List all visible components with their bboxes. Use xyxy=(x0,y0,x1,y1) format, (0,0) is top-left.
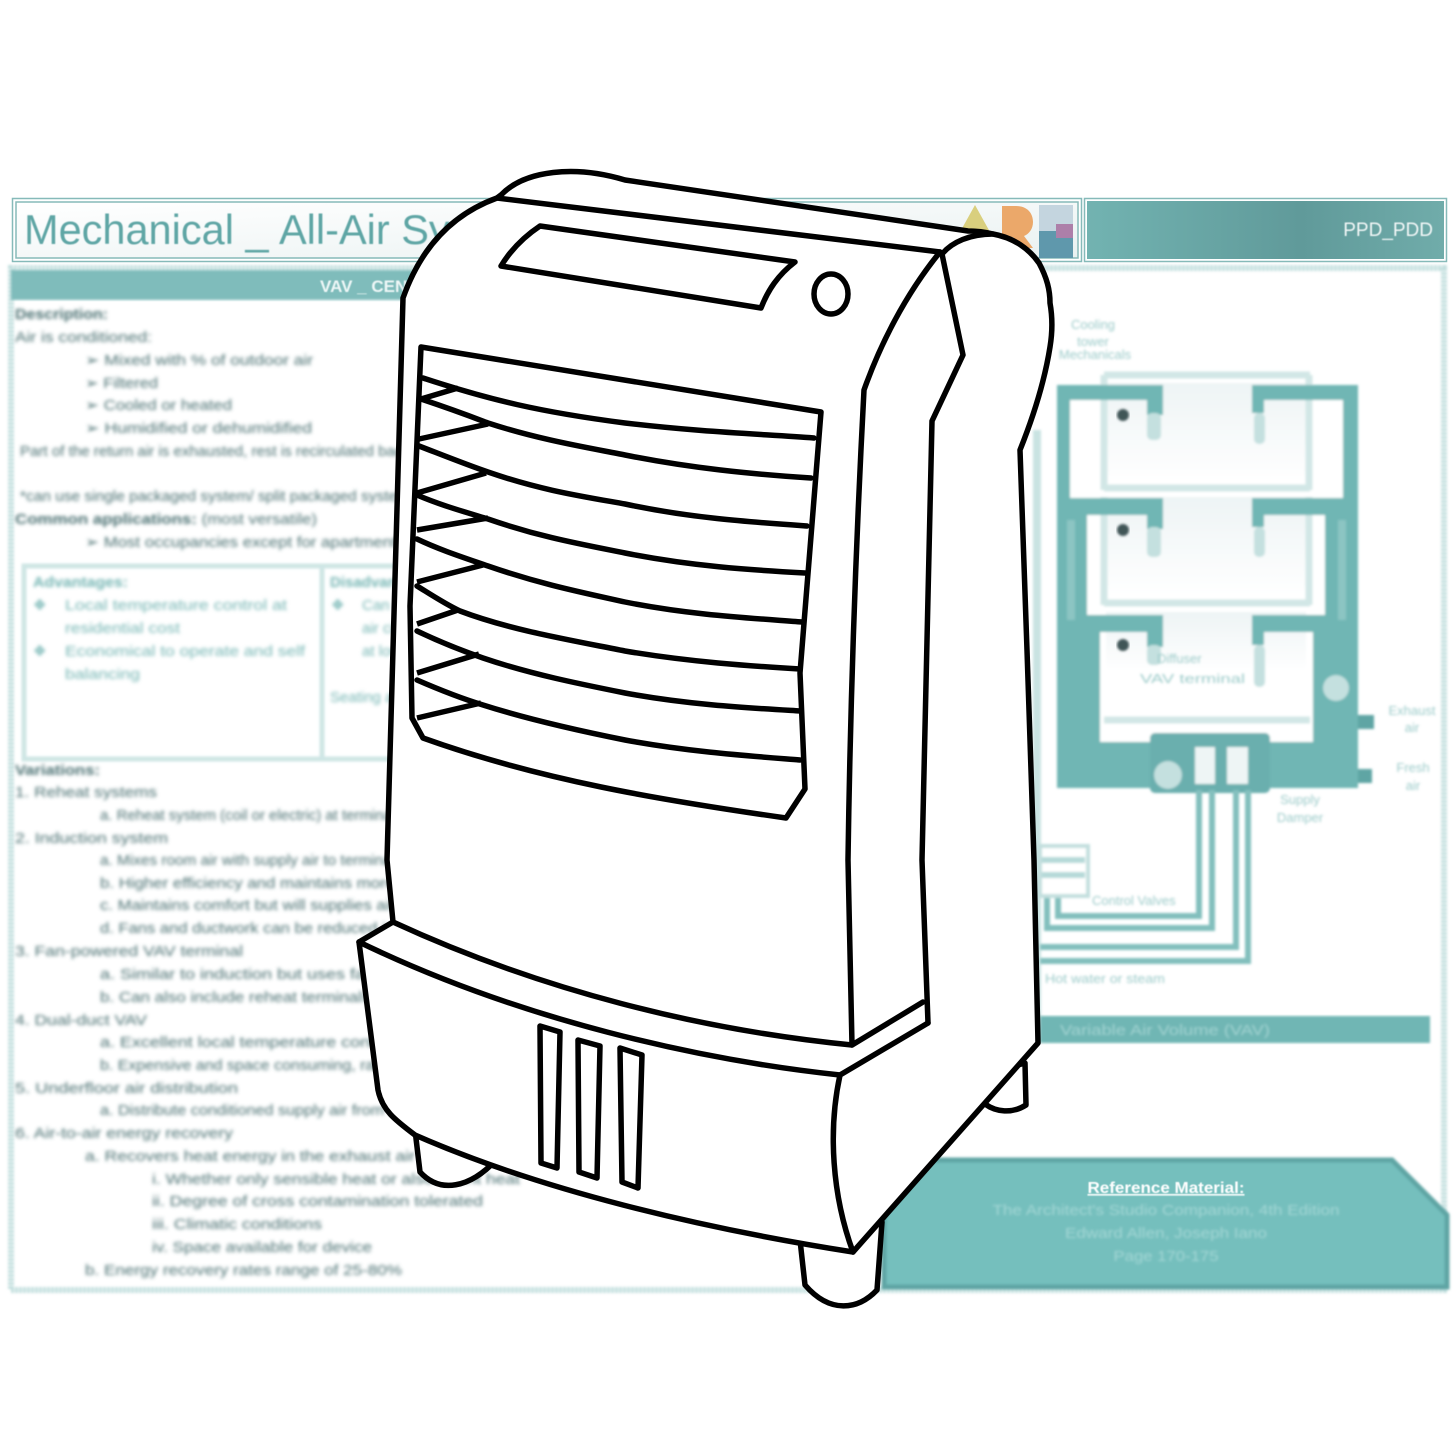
right foot xyxy=(800,1222,882,1306)
diagram caption: Variable Air Volume (VAV) xyxy=(1060,1022,1270,1039)
advantages list: Economical to operate and self xyxy=(65,643,306,660)
left foot xyxy=(415,1130,496,1185)
diagram labels: Fresh xyxy=(1396,760,1430,775)
advantages list: Local temperature control at xyxy=(65,597,288,614)
text block: description: ➢ Humidified or dehumidified xyxy=(85,420,312,437)
icon: portable air cooler xyxy=(359,172,1052,1306)
VAV system diagram xyxy=(1037,317,1436,1040)
text block: variations: iii. Climatic conditions xyxy=(152,1216,322,1233)
text block: variations: b. Energy recovery rates range of 25-80% xyxy=(85,1262,402,1279)
cooler silhouette xyxy=(359,172,1052,1252)
text block: variations: 5. Underfloor air distribution xyxy=(15,1080,238,1097)
text block: variations: 2. Induction system xyxy=(15,830,168,847)
text block: description: Air is conditioned: xyxy=(15,329,152,346)
base vent slots xyxy=(540,1026,642,1188)
text block: variations: iv. Space available for device xyxy=(152,1239,372,1256)
text block: description xyxy=(15,306,410,551)
text block: variations: c. Maintains comfort but will supplies air xyxy=(100,897,395,914)
text block: description: ➢ Most occupancies except for apartments xyxy=(85,534,405,551)
base panel lines xyxy=(359,922,928,1252)
text block: description: Common applications: (most versatile) xyxy=(15,511,317,528)
title bar xyxy=(12,198,1082,262)
text block: variations: b. Higher efficiency and maintains more xyxy=(100,875,395,892)
text block: variations: a. Distribute conditioned supply air from floor xyxy=(100,1102,420,1119)
text block: variations: 6. Air-to-air energy recovery xyxy=(15,1125,234,1142)
panel: reference material: Reference Material: xyxy=(1088,1180,1244,1197)
text block: variations: ii. Degree of cross contamination tolerated xyxy=(152,1193,483,1210)
text block: variations: b. Can also include reheat terminals for xyxy=(100,989,395,1006)
content frame xyxy=(11,268,1444,1290)
diagram labels: Hot water or steam xyxy=(1045,971,1165,986)
advantages list: Can have poor xyxy=(362,597,460,614)
text block: variations: 3. Fan-powered VAV terminal xyxy=(15,943,243,960)
title text: All-Air Systems xyxy=(279,206,560,253)
advantages list: at low loads xyxy=(362,643,441,660)
text block: description: *can use single packaged system/ split packaged system xyxy=(20,488,410,505)
text block: variations: 1. Reheat systems xyxy=(15,784,157,801)
text block: variations: a. Mixes room air with supply air to terminal xyxy=(100,852,395,869)
text block: description: Part of the return air is exhausted, rest is recirculated back xyxy=(20,443,410,460)
diagram labels: air xyxy=(1405,720,1420,735)
panel: reference material: Edward Allen, Joseph Iano xyxy=(1065,1225,1267,1242)
text block: variations xyxy=(15,762,521,1279)
diagram labels: Exhaust xyxy=(1389,703,1436,718)
advantages list: Seating areas xyxy=(330,689,423,706)
advantages list: Advantages: xyxy=(33,574,128,591)
advantages list: Disadvantages: xyxy=(330,574,441,591)
panel: reference material xyxy=(884,1160,1447,1287)
diagram labels: VAV terminal xyxy=(1140,671,1245,686)
panel: advantages and disadvantages xyxy=(24,566,724,759)
text block: variations: a. Similar to induction but uses fan to xyxy=(100,966,395,983)
panel header: VAV central: VAV _ CENTRAL AIR SYSTEM xyxy=(320,277,560,296)
panel: reference material: Page 170-175 xyxy=(1114,1248,1218,1265)
control knob xyxy=(814,274,848,314)
text block: variations: a. Recovers heat energy in the exhaust air xyxy=(85,1148,415,1165)
text block: description: Description: xyxy=(15,306,108,323)
text block: description: ➢ Filtered xyxy=(85,375,158,392)
panel header: VAV central xyxy=(11,270,801,300)
advantages list: balancing xyxy=(65,666,140,683)
diagram labels: Cooling xyxy=(1071,317,1115,332)
diagram labels: air xyxy=(1406,778,1421,793)
display window xyxy=(501,226,795,308)
diagram caption xyxy=(1040,1016,1430,1043)
front panel right edge xyxy=(848,252,940,1045)
text block: variations: Variations: xyxy=(15,762,100,779)
advantages list: residential cost xyxy=(65,620,181,637)
title text: Mechanical _ xyxy=(24,206,269,253)
text block: variations: b. Expensive and space consuming, rarely xyxy=(100,1057,401,1074)
advantages list: air circulation xyxy=(362,620,450,637)
panel: reference material: The Architect's Studio Companion, 4th Edition xyxy=(992,1202,1340,1219)
diagram labels: tower xyxy=(1077,334,1110,349)
text block: description: ➢ Mixed with % of outdoor air xyxy=(85,352,313,369)
diagram labels: Supply xyxy=(1280,792,1320,807)
side panel edge xyxy=(922,234,993,1023)
diagram labels: Control Valves xyxy=(1092,893,1176,908)
thermostat dots xyxy=(1117,409,1129,651)
building ductwork xyxy=(1037,375,1374,1040)
rear foot xyxy=(985,1063,1026,1111)
text block: variations: a. Reheat system (coil or electric) at terminal xyxy=(100,807,395,824)
text block: variations: a. Excellent local temperature control xyxy=(100,1034,395,1051)
text block: variations: 4. Dual-duct VAV xyxy=(15,1012,147,1029)
advantages list: ❖ xyxy=(33,643,46,660)
text block: variations: i. Whether only sensible heat or also latent heat xyxy=(152,1171,521,1188)
logo xyxy=(960,205,1073,258)
louvre grille xyxy=(410,347,821,818)
advantages list: ❖ xyxy=(331,597,344,614)
text block: description: ➢ Cooled or heated xyxy=(85,397,232,414)
text block: variations: d. Fans and ductwork can be reduced in xyxy=(100,920,395,937)
diagram labels: Damper xyxy=(1277,810,1324,825)
top edge xyxy=(497,198,940,252)
diagram labels xyxy=(1045,317,1436,986)
advantages list xyxy=(33,574,460,706)
diagram labels: Mechanicals xyxy=(1059,347,1132,362)
project phase tag xyxy=(1084,198,1446,262)
project phase tag: PPD_PDD xyxy=(1343,220,1433,241)
hydronic pipes xyxy=(1040,790,1248,961)
diagram labels: Diffuser xyxy=(1157,651,1202,666)
advantages list: ❖ xyxy=(33,597,46,614)
